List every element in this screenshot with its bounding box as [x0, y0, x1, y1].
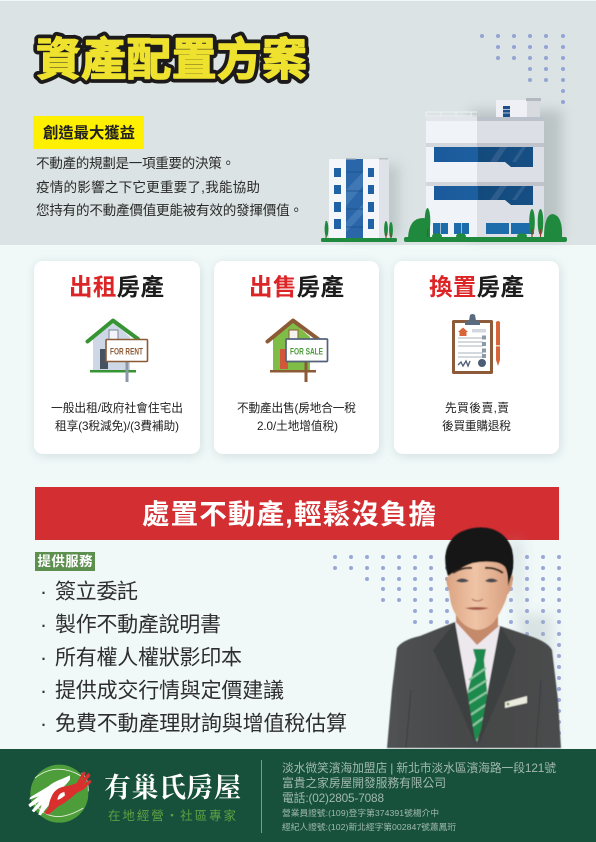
photo: agent portrait: [387, 527, 561, 748]
heading: sale: 出售房產: [249, 273, 344, 300]
icon: for sale house: [268, 320, 328, 382]
text: exchange description: 後買重購退稅: [442, 419, 511, 433]
services list: ·: [40, 680, 47, 702]
company info text: 經紀人證號:(102)新北經字第002847號蕭鳳珩: [282, 821, 456, 832]
title: 資產配置方案: [36, 34, 307, 85]
banner: 處置不動產,輕鬆沒負擔: [142, 498, 436, 530]
illustration: large building: [404, 98, 567, 242]
tag: services: 提供服務: [38, 553, 93, 569]
heading: exchange: 換置房產: [429, 273, 524, 300]
panel: footer background: [0, 749, 596, 842]
text: sale description: 不動產出售(房地合一稅: [237, 401, 356, 415]
company info text: [282, 761, 556, 832]
text: rent description: 一般出租/政府社會住宅出: [51, 401, 183, 415]
illustration: small building: [321, 158, 399, 242]
intro text block: [36, 155, 303, 218]
heading: rent: 出租房產: [69, 273, 164, 300]
services list: 提供成交行情與定價建議: [55, 680, 284, 702]
services list: ·: [40, 712, 47, 736]
decoration: lower dot grid: [335, 557, 559, 733]
services list: [40, 580, 347, 736]
divider line: [261, 760, 262, 833]
services list: ·: [40, 646, 47, 670]
text: exchange description: [442, 401, 511, 433]
logo: slogan: 在地經營‧社區專家: [108, 808, 236, 823]
text: rent description: 租享(3稅減免)/(3費補助): [55, 419, 179, 433]
services list: ·: [40, 580, 47, 604]
text: sale description: 2.0/土地增值稅): [257, 419, 338, 433]
company info text: 富貴之家房屋開發服務有限公司: [282, 776, 446, 790]
icon: for sale house: FOR SALE: [290, 346, 323, 358]
title: 資產配置方案: [36, 34, 307, 85]
panel: sale card: [214, 261, 379, 454]
services list: 所有權人權狀影印本: [55, 646, 242, 670]
subtitle tag: 創造最大獲益: [43, 124, 135, 142]
panel: header background: [0, 1, 596, 245]
services list: 製作不動產說明書: [55, 614, 221, 636]
panel: exchange card: [394, 261, 559, 454]
icon: clipboard and pen: [452, 314, 500, 374]
logo: brand emblem: [28, 765, 92, 823]
banner: [35, 487, 559, 540]
intro text block: 不動產的規劃是一項重要的決策。: [36, 155, 235, 171]
company info text: 電話:(02)2805-7088: [282, 791, 384, 805]
intro text block: 您持有的不動產價值更能被有效的發揮價值。: [36, 202, 303, 218]
company info text: 淡水微笑濱海加盟店 | 新北市淡水區濱海路一段121號: [282, 761, 556, 775]
services list: 免費不動產理財詢與增值稅估算: [55, 712, 347, 736]
decoration: top dot grid: [482, 36, 563, 102]
text: exchange description: 先買後賣,賣: [445, 401, 509, 415]
logo: brand name: 有巢氏房屋: [104, 773, 241, 803]
company info text: 營業員證號:(109)登字第374391號楊介中: [282, 807, 439, 818]
services list: 簽立委託: [55, 580, 138, 604]
panel: rent card: [34, 261, 200, 454]
icon: for rent house: [88, 320, 148, 382]
icon: for rent house: FOR RENT: [110, 346, 143, 358]
services list: ·: [40, 614, 47, 636]
text: sale description: [237, 401, 356, 433]
subtitle tag: [33, 116, 144, 149]
text: rent description: [51, 401, 183, 433]
intro text block: 疫情的影響之下它更重要了,我能協助: [36, 179, 260, 195]
